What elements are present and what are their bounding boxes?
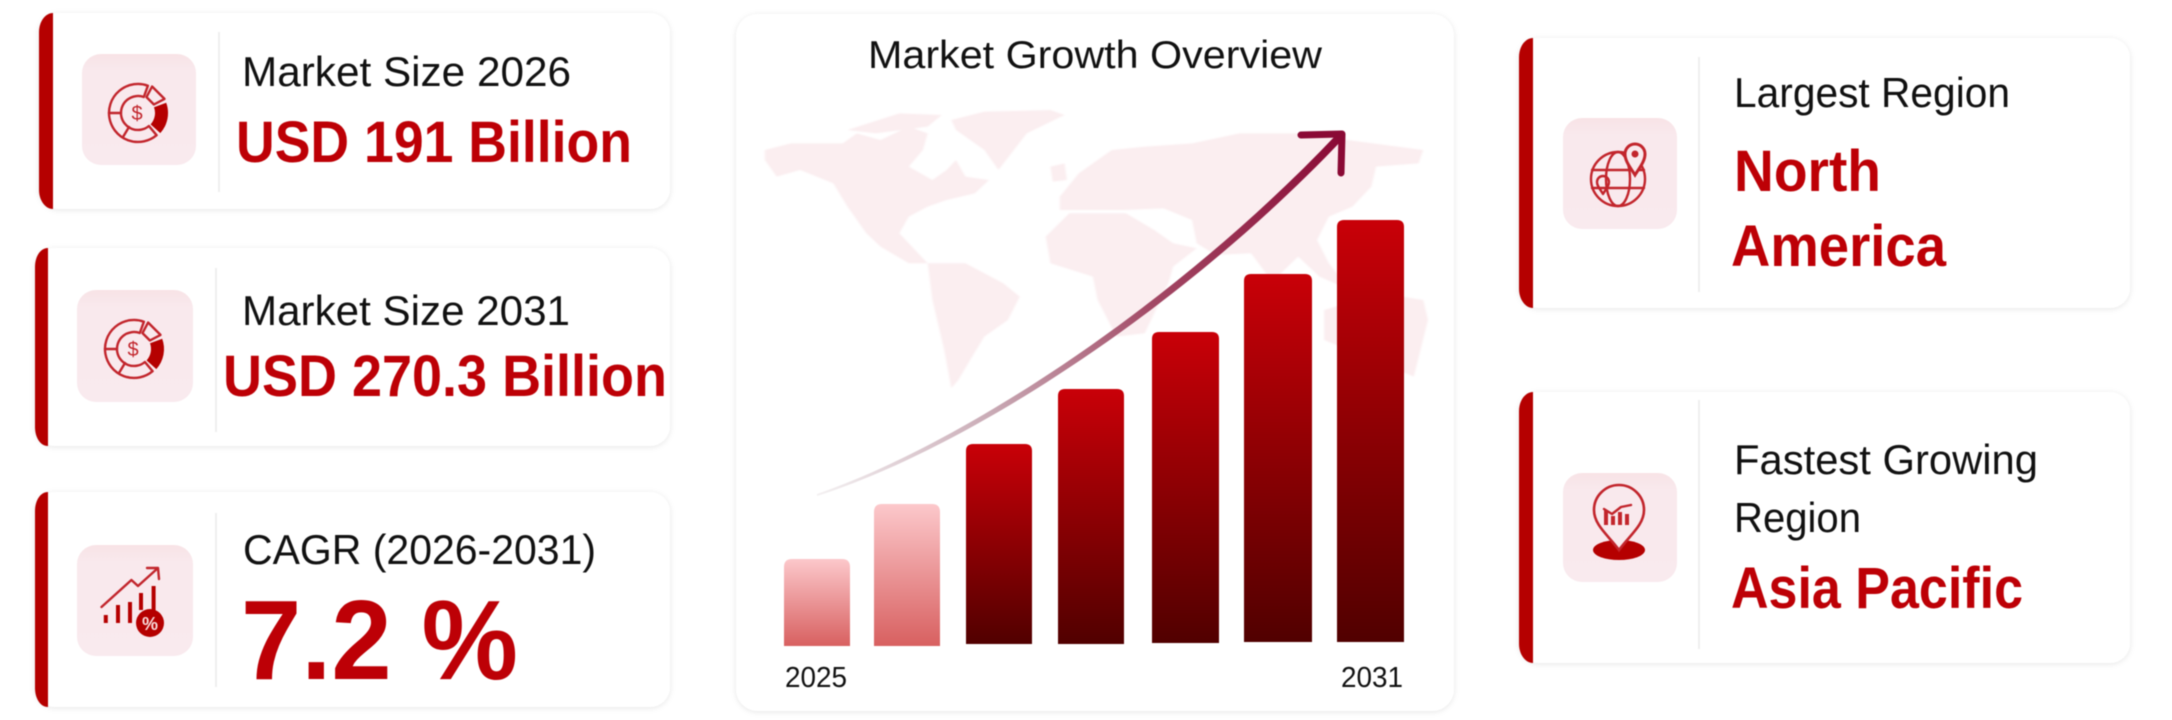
panel: market growth overview [736, 14, 1454, 711]
icon: growth chart with percent badge: % [142, 614, 158, 634]
label: fastest growing region [1734, 436, 2038, 541]
label: CAGR period: CAGR (2026-2031) [243, 526, 596, 573]
label: largest region: Largest Region [1734, 69, 2010, 116]
bar chart [784, 220, 1404, 646]
panel: market size 2026 [39, 13, 670, 209]
value: USD 191 Billion: USD 191 Billion [236, 110, 632, 175]
value: 7.2 %: 7.2 % [241, 577, 518, 703]
label: fastest growing region: Region [1734, 494, 1861, 541]
panel: market size 2031 [35, 248, 670, 446]
axis label: 2031: 2031 [1341, 662, 1403, 694]
icon: donut chart with dollar: $ [127, 339, 139, 361]
world map background [765, 110, 1428, 388]
icon: globe with pin [1563, 118, 1677, 229]
arrow: growth trend [817, 134, 1343, 496]
icon: growth chart with percent badge [77, 545, 193, 656]
value: Asia Pacific: Asia Pacific [1731, 556, 2023, 621]
label: market size 2031: Market Size 2031 [242, 287, 570, 334]
panel: CAGR [35, 492, 670, 707]
label: market size 2026: Market Size 2026 [242, 48, 571, 95]
heading: market growth overview: Market Growth Overview [868, 34, 1323, 77]
value: North America: America [1731, 214, 1947, 279]
axis label: 2025: 2025 [785, 662, 847, 694]
icon: donut chart with dollar: $ [131, 103, 143, 125]
value: North America [1731, 139, 1947, 279]
value: North America: North [1734, 139, 1881, 204]
icon: map pin with bars [1563, 473, 1677, 582]
icon: donut chart with dollar [77, 290, 193, 402]
label: fastest growing region: Fastest Growing [1734, 436, 2038, 483]
panel: fastest growing region [1519, 392, 2130, 663]
icon: donut chart with dollar [82, 54, 196, 165]
panel: largest region [1519, 38, 2130, 308]
value: USD 270.3 Billion: USD 270.3 Billion [223, 344, 667, 409]
